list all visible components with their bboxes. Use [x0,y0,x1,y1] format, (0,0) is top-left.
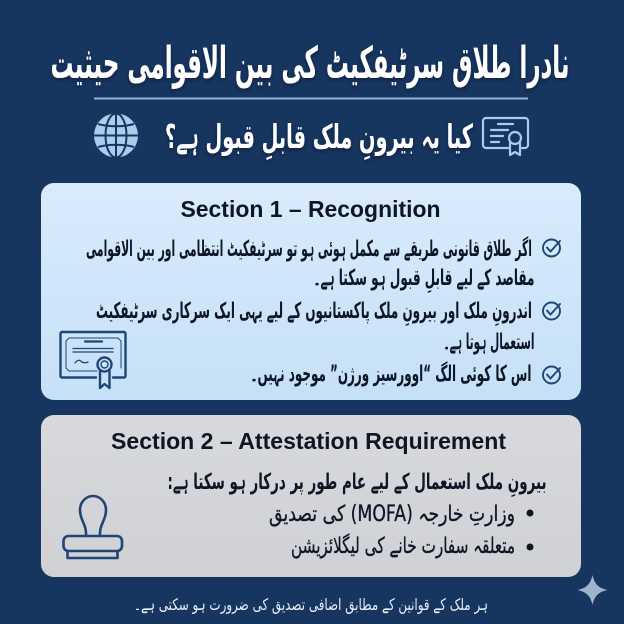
panel: section 2 attestation requirement [41,415,581,577]
bullet 2 text [96,299,534,355]
icon: stamp [64,496,122,558]
heading: section 2: Section 2 – Attestation Requirement [111,428,506,454]
footer note: ہر ملک کے قوانین کے مطابق اضافی تصدیق کی ضرورت ہو سکتی ہے۔ [134,595,488,615]
icon: certificate (panel) [60,332,126,388]
bullet: embassy legalization: متعلقہ سفارت خانے کی لیگلائزیشن [291,533,515,559]
heading: section 1: Section 1 – Recognition [180,196,440,222]
panel: section 1 recognition [41,183,581,400]
icon: globe [94,114,138,158]
icon: check 3 [543,366,560,384]
bullet: MOFA: وزارتِ خارجہ (MOFA) کی تصدیق [269,502,515,527]
icon: sparkle star [578,575,608,605]
icon: certificate (header) [483,118,528,155]
bullet 1 text [86,235,534,294]
icon: check 1 [543,240,560,256]
icon: check 2 [543,302,560,320]
